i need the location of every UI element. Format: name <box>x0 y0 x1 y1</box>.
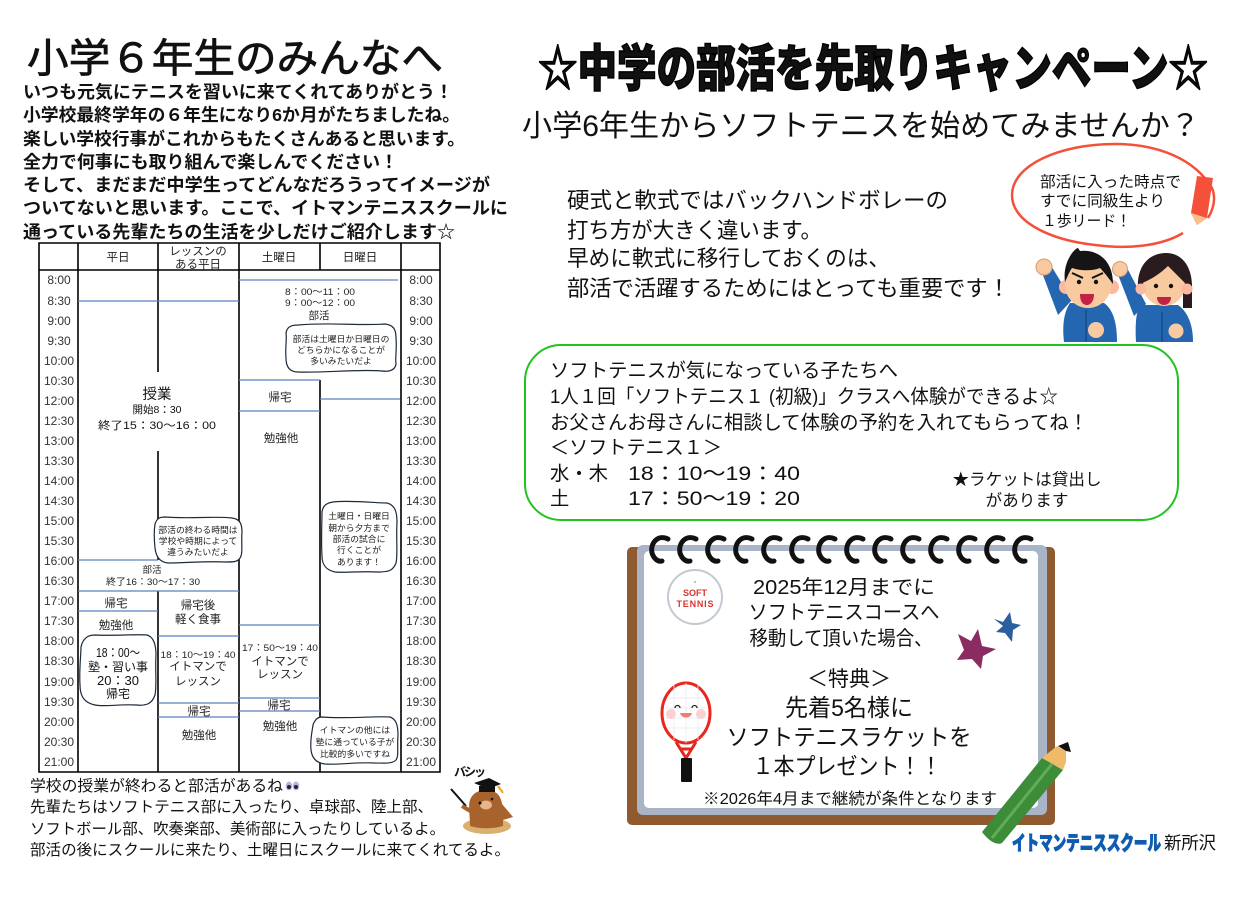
callout: cram school: 帰宅 <box>106 687 130 701</box>
time labels left: 15:00 <box>44 514 74 528</box>
callout: club day: どちらかになることが <box>297 344 385 355</box>
table header: 土曜日 <box>262 251 296 264</box>
time labels right: 8:30 <box>409 294 433 308</box>
callout: weekend matches <box>322 501 397 572</box>
text block: hard vs soft tennis: 早めに軟式に移行しておくのは、 <box>567 246 890 271</box>
callout: other lessons: イトマンの他には <box>320 724 390 735</box>
time labels right: 13:30 <box>406 454 436 468</box>
text block: hard vs soft tennis <box>567 188 1010 301</box>
weekday labels <box>99 564 200 632</box>
Saturday labels: 勉強他 <box>263 720 298 733</box>
time labels left: 21:00 <box>44 755 74 769</box>
time labels left: 9:00 <box>47 314 71 328</box>
lesson weekday labels: レッスン <box>175 676 221 688</box>
weekday labels: 部活 <box>142 564 162 576</box>
notebook spirals <box>652 538 1031 561</box>
callout: weekend matches: 朝から夕方まで <box>328 522 390 533</box>
logo: 新所沢 <box>1164 833 1216 853</box>
callout: cram school: 20：30 <box>97 673 139 688</box>
callout: other lessons: 塾に通っている子が <box>316 736 395 747</box>
table header: 日曜日 <box>343 251 377 264</box>
callout: red speech bubble: すでに同級生より <box>1040 192 1165 210</box>
weekday labels: 勉強他 <box>99 619 134 632</box>
icon: eyes <box>286 782 299 790</box>
time labels left: 17:30 <box>44 614 74 628</box>
time labels right: 18:30 <box>406 654 436 668</box>
time labels left: 13:00 <box>44 434 74 448</box>
time labels right: 19:00 <box>406 675 436 689</box>
note: racket rental: があります <box>986 491 1068 510</box>
time labels right: 9:30 <box>409 334 433 348</box>
text block: intro message: 全力で何事にも取り組んで楽しんでください！ <box>23 152 398 172</box>
text block: intro message: 小学校最終学年の６年生になり6か月がたちましたね。 <box>23 104 460 125</box>
panel: notebook <box>627 538 1071 844</box>
time labels left: 8:30 <box>47 294 71 308</box>
lesson weekday labels: 軽く食事 <box>175 613 221 626</box>
time labels left: 8:00 <box>47 273 71 287</box>
lesson weekday labels <box>160 598 236 742</box>
icon: green pencil <box>982 742 1071 844</box>
callout: weekend matches: 部活の試合に <box>333 533 385 544</box>
Saturday labels: レッスン <box>257 669 303 681</box>
icon: mole teacher: バシッ <box>454 765 486 779</box>
time labels right: 10:30 <box>406 374 436 388</box>
panel: trial lesson: お父さんお母さんに相談して体験の予約を入れてもらってね！ <box>550 412 1088 434</box>
club activity weekend text: 8：00～11：00 <box>285 287 355 298</box>
callout: club end time: 学校や時期によって <box>159 535 237 546</box>
subtitle: 小学6年生からソフトテニスを始めてみませんか？ <box>522 110 1200 143</box>
time labels right: 16:00 <box>406 554 436 568</box>
notebook campaign text: 先着5名様に <box>785 695 913 722</box>
callout: club day <box>286 324 396 372</box>
time labels right: 10:00 <box>406 354 436 368</box>
text block: hard vs soft tennis: 部活で活躍するためにはとっても重要です！ <box>567 276 1010 301</box>
club activity weekend text <box>285 287 355 322</box>
time labels left: 14:00 <box>44 474 74 488</box>
time labels left: 20:00 <box>44 715 74 729</box>
icon: purple star <box>957 629 996 669</box>
callout: club day: 部活は土曜日か日曜日の <box>293 333 389 344</box>
time labels right: 12:00 <box>406 394 436 408</box>
callout: club end time: 部活の終わる時間は <box>158 524 238 535</box>
callout: club end time: 違うみたいだよ <box>167 546 229 557</box>
notebook campaign text: １本プレゼント！！ <box>752 753 942 779</box>
time labels right: 18:00 <box>406 634 436 648</box>
callout: weekend matches: 土曜日・日曜日 <box>328 510 390 521</box>
table header: レッスンの <box>169 246 227 258</box>
text block: hard vs soft tennis: 打ち方が大きく違います。 <box>567 218 822 243</box>
time labels left: 17:00 <box>44 594 74 608</box>
time labels left: 14:30 <box>44 494 74 508</box>
time labels right: 12:30 <box>406 414 436 428</box>
lesson weekday labels: イトマンで <box>169 661 227 673</box>
notebook campaign text: 2025年12月までに <box>753 576 935 599</box>
callout: red speech bubble: １歩リード！ <box>1042 212 1131 230</box>
callout: weekend matches: あります！ <box>337 557 381 567</box>
time labels left: 10:30 <box>44 374 74 388</box>
panel: trial lesson: ＜ソフトテニス１＞ <box>550 438 722 459</box>
lesson weekday labels: 18：10～19：40 <box>160 650 236 661</box>
class block text: 終了15：30～16：00 <box>98 419 216 432</box>
text block: intro message: そして、まだまだ中学生ってどんなだろうってイメージが <box>23 174 490 195</box>
time labels right: 19:30 <box>406 695 436 709</box>
time labels right <box>406 273 436 769</box>
notebook campaign text: ＜特典＞ <box>807 668 891 691</box>
callout: other lessons <box>311 717 398 764</box>
icon: mole teacher <box>451 765 513 834</box>
Saturday labels: 帰宅 <box>268 391 292 404</box>
weekday labels: 帰宅 <box>104 597 128 610</box>
Saturday labels <box>242 391 318 733</box>
class block text: 開始8：30 <box>132 403 182 416</box>
panel: trial lesson: 18：10～19：40 <box>628 464 800 485</box>
lesson weekday labels: 帰宅 <box>188 705 210 718</box>
lesson weekday labels: 勉強他 <box>182 729 217 742</box>
text block: intro message <box>23 81 508 242</box>
callout: cram school <box>80 635 156 706</box>
icon: soft tennis ball: TENNIS <box>676 599 714 609</box>
time labels right: 16:30 <box>406 574 436 588</box>
time labels left: 18:00 <box>44 634 74 648</box>
club activity weekend text: 部活 <box>308 310 330 322</box>
time labels right: 8:00 <box>409 273 433 287</box>
time labels left: 16:30 <box>44 574 74 588</box>
callout: red speech bubble <box>1012 144 1214 247</box>
time labels right: 17:30 <box>406 614 436 628</box>
time labels right: 13:00 <box>406 434 436 448</box>
text block: after school notes: 先輩たちはソフトテニス部に入ったり、卓球部、陸上部、 <box>30 799 433 816</box>
callout: other lessons: 比較的多いですね <box>320 748 390 759</box>
callout: cram school: 塾・習い事 <box>88 660 148 674</box>
time labels left: 19:00 <box>44 675 74 689</box>
note: racket rental <box>952 470 1102 510</box>
time labels left: 18:30 <box>44 654 74 668</box>
notebook campaign text: ※2026年4月まで継続が条件となります <box>703 790 997 808</box>
Saturday labels: 帰宅 <box>268 699 290 712</box>
panel: trial lesson: 1人１回「ソフトテニス１ (初級)」クラスへ体験ができるよ☆ <box>550 386 1058 408</box>
time labels left: 9:30 <box>47 334 71 348</box>
notebook campaign text: ソフトテニスコースへ <box>748 602 940 624</box>
text block: intro message: いつも元気にテニスを習いに来てくれてありがとう！ <box>23 81 453 102</box>
Saturday labels: 勉強他 <box>264 432 299 445</box>
time labels left: 15:30 <box>44 534 74 548</box>
panel: trial lesson: 土 <box>550 488 569 510</box>
text block: after school notes: 部活の後にスクールに来たり、土曜日にスクールに来てくれてるよ。 <box>30 842 510 859</box>
time labels left <box>44 273 74 769</box>
panel: trial lesson: 17：50～19：20 <box>628 489 800 510</box>
time labels left: 13:30 <box>44 454 74 468</box>
class block text: 授業 <box>142 386 172 403</box>
text block: intro message: 通っている先輩たちの生活を少しだけご紹介します☆ <box>23 221 455 242</box>
notebook campaign text <box>703 576 997 808</box>
icon: boy in tracksuit <box>1036 248 1119 342</box>
time labels right: 14:00 <box>406 474 436 488</box>
time labels right: 20:30 <box>406 735 436 749</box>
Saturday labels: イトマンで <box>251 656 309 668</box>
table header: 平日 <box>106 252 130 264</box>
time labels right: 17:00 <box>406 594 436 608</box>
panel: trial lesson: ソフトテニスが気になっている子たちへ <box>550 360 898 382</box>
time labels right: 15:30 <box>406 534 436 548</box>
icon: blue star <box>994 612 1021 642</box>
icon: smiling racket <box>662 683 710 782</box>
time labels left: 16:00 <box>44 554 74 568</box>
time labels right: 9:00 <box>409 314 433 328</box>
text block: after school notes <box>30 778 510 859</box>
icon: soft tennis ball <box>668 570 722 624</box>
weekday labels: 終了16：30～17：30 <box>106 576 200 588</box>
club activity weekend text: 9：00～12：00 <box>285 298 355 309</box>
time labels right: 20:00 <box>406 715 436 729</box>
time labels left: 10:00 <box>44 354 74 368</box>
logo: イトマンテニススクール <box>1012 832 1161 855</box>
time labels right: 21:00 <box>406 755 436 769</box>
text block: after school notes: ソフトボール部、吹奏楽部、美術部に入ったりしているよ。 <box>30 821 445 838</box>
table header <box>106 246 377 271</box>
time labels right: 15:00 <box>406 514 436 528</box>
time labels left: 19:30 <box>44 695 74 709</box>
callout: cram school: 18：00～ <box>96 646 140 660</box>
table header: ある平日 <box>175 258 221 271</box>
heading: for 6th graders: 小学６年生のみんなへ <box>27 37 443 81</box>
text block: intro message: ついてないと思います。ここで、イトマンテニススクールに <box>23 198 508 218</box>
text block: hard vs soft tennis: 硬式と軟式ではバックハンドボレーの <box>567 188 948 213</box>
note: racket rental: ★ラケットは貸出し <box>952 470 1102 489</box>
callout: club day: 多いみたいだよ <box>310 355 372 366</box>
panel: trial lesson <box>525 345 1178 520</box>
class block text <box>98 386 216 432</box>
time labels left: 20:30 <box>44 735 74 749</box>
text block: intro message: 楽しい学校行事がこれからもたくさんあると思います。 <box>23 128 465 149</box>
notebook campaign text: ソフトテニスラケットを <box>726 724 972 750</box>
icon: soft tennis ball: SOFT <box>683 588 708 598</box>
icon: girl in tracksuit <box>1112 253 1193 342</box>
time labels left: 12:30 <box>44 414 74 428</box>
callout: red speech bubble: 部活に入った時点で <box>1040 173 1181 191</box>
notebook campaign text: 移動して頂いた場合、 <box>750 627 932 650</box>
Saturday labels: 17：50～19：40 <box>242 643 318 654</box>
timetable <box>39 243 440 772</box>
panel: trial lesson: 水・木 <box>550 463 608 485</box>
callout: weekend matches: 行くことが <box>337 544 381 555</box>
time labels left: 12:00 <box>44 394 74 408</box>
text block: after school notes: 学校の授業が終わると部活があるね <box>30 778 283 795</box>
lesson weekday labels: 帰宅後 <box>181 598 216 612</box>
time labels right: 14:30 <box>406 494 436 508</box>
callout: club end time <box>154 517 242 563</box>
